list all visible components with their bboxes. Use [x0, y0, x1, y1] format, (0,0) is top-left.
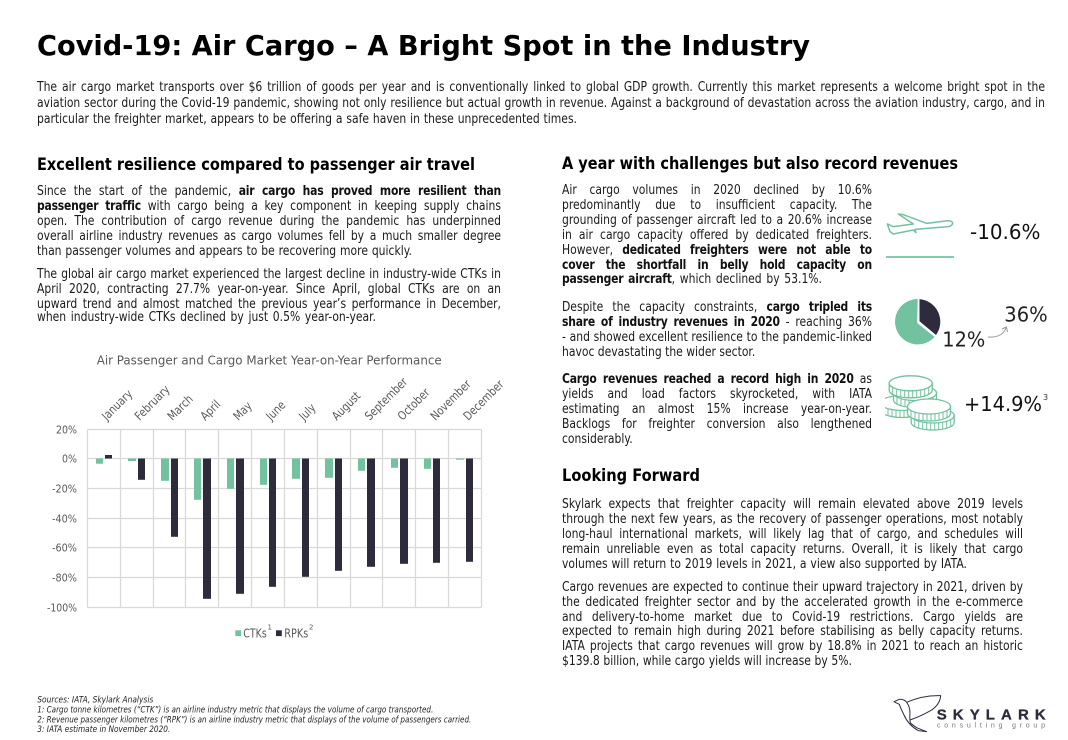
text block: resilience paragraph two: upward trend and almost matched the previous year’s performance in December,: [37, 297, 501, 312]
legend: CTKs: [243, 626, 267, 640]
text block: resilience paragraph one: than passenger volumes and appears to be recovering more quickly.: [37, 244, 412, 259]
text block: air cargo volumes: Air cargo volumes in 2020 declined by 10.6%: [562, 183, 872, 198]
text block: looking forward paragraph two: the dedicated freighter sector and by the accelerated growth in the e-commerce: [562, 595, 1023, 610]
text block: looking forward paragraph one: volumes will return to 2019 levels in 2021, a view also supported by IATA.: [562, 557, 967, 572]
text block: looking forward paragraph two: [562, 580, 1023, 669]
footnotes: Sources: IATA, Skylark Analysis: [37, 695, 154, 705]
stat: volume decline with plane icon: [886, 213, 1040, 258]
month labels: February: [132, 382, 173, 423]
tagline: consulting group: [937, 722, 1045, 730]
bar chart: air passenger and cargo performance: [47, 352, 507, 640]
chart title: Air Passenger and Cargo Market Year-on-Year Performance: [97, 352, 442, 368]
text block: looking forward paragraph one: remain unreliable even as total capacity returns. Overall, it is likely that cargo: [562, 542, 1023, 557]
y axis labels: -40%: [52, 512, 77, 526]
text block: cargo tripled share: share of industry revenues in 2020 - reaching 36%: [562, 315, 872, 330]
y axis labels: -20%: [52, 482, 77, 496]
text block: resilience paragraph two: April 2020, contracting 27.7% year-on-year. Since April, global CTKs are on an: [37, 282, 501, 297]
text block: air cargo volumes: [562, 183, 872, 287]
month labels: June: [263, 398, 289, 424]
y axis labels: 0%: [62, 452, 77, 466]
footnotes: [37, 695, 471, 735]
title: Covid-19: Air Cargo – A Bright Spot in the Industry: [37, 29, 810, 62]
legend: RPKs: [284, 626, 308, 640]
text block: resilience paragraph one: [37, 184, 501, 259]
text block: looking forward paragraph one: [562, 497, 1023, 572]
text block: looking forward paragraph two: $139.8 billion, while cargo yields will increase by 5%.: [562, 654, 852, 669]
intro text: The air cargo market transports over $6 trillion of goods per year and is conventionally linked to global GDP growth. Currently this market represents a welcome bright spot in the: [37, 80, 1045, 95]
legend: [235, 624, 313, 640]
text block: resilience paragraph two: when industry-wide CTKs declined by just 0.5% year-on-year.: [37, 310, 376, 325]
text block: air cargo volumes: in air cargo capacity offered by dedicated freighters.: [562, 228, 872, 243]
value: 12%: 12%: [942, 328, 985, 352]
stat: revenue growth with coins: [885, 375, 1048, 431]
y axis labels: [47, 424, 77, 614]
footnote marker: 3: [1043, 393, 1048, 402]
month labels: October: [395, 385, 433, 423]
intro text: aviation sector during the Covid-19 pandemic, showing not only resilience but actual growth in revenue. Against a background of devastation across the aviation industry, cargo, and in: [37, 96, 1045, 111]
text block: resilience paragraph one: passenger traffic with cargo being a key component in keeping supply chains: [37, 199, 501, 214]
text block: air cargo volumes: grounding of passenger aircraft led to a 20.6% increase: [562, 213, 872, 228]
month labels: July: [296, 400, 319, 424]
month labels: April: [198, 397, 224, 423]
value: +14.9%: [964, 392, 1042, 416]
text block: record revenues: estimating an almost 15% increase year-on-year.: [562, 402, 872, 417]
wordmark: SKYLARK: [937, 706, 1046, 723]
text block: air cargo volumes: passenger aircraft, which declined by 53.1%.: [562, 272, 822, 287]
logo: skylark consulting group: [894, 695, 1046, 732]
intro text: particular the freighter market, appears to be offering a safe haven in these unprecedented times.: [37, 112, 577, 127]
icon: pie chart: [895, 299, 940, 344]
icon: bird: [894, 696, 941, 732]
RPK bars: [105, 455, 473, 599]
text block: record revenues: Cargo revenues reached a record high in 2020 as: [562, 372, 872, 387]
month labels: August: [329, 388, 364, 423]
icon: coins: [880, 376, 954, 430]
text block: looking forward paragraph two: expected to remain high during 2021 before stabilising as belly capacity returns.: [562, 624, 1023, 639]
CTK bars: [96, 458, 464, 500]
y axis labels: -100%: [47, 602, 77, 614]
y axis labels: 20%: [56, 424, 77, 436]
text block: air cargo volumes: cover the shortfall in belly hold capacity on: [562, 258, 872, 273]
icon: plane taking off: [886, 214, 954, 257]
text block: cargo tripled share: [562, 300, 872, 360]
month labels: March: [165, 392, 196, 423]
text block: resilience paragraph one: open. The contribution of cargo revenue during the pandemic has underpinned: [37, 214, 501, 229]
legend: 1: [268, 624, 272, 632]
month labels: November: [428, 377, 474, 423]
y axis labels: -80%: [52, 572, 77, 584]
legend: 2: [309, 624, 313, 632]
intro text: [36, 80, 1045, 127]
text block: record revenues: [562, 372, 872, 447]
text block: looking forward paragraph two: IATA projects that cargo revenues will grow by 18.8% in 2021 to reach an historic: [562, 639, 1023, 654]
text block: cargo tripled share: Despite the capacity constraints, cargo tripled its: [562, 300, 872, 315]
text block: cargo tripled share: havoc devastating the wider sector.: [562, 345, 755, 360]
text block: resilience paragraph one: Since the start of the pandemic, air cargo has proved more resilient than: [37, 184, 501, 199]
month labels: December: [461, 377, 507, 423]
text block: resilience paragraph two: [36, 267, 501, 325]
text block: looking forward paragraph two: Cargo revenues are expected to continue their upward trajectory in 2021, driven by: [562, 580, 1023, 595]
month labels: [98, 375, 507, 424]
stat: share of revenue with pie: [895, 299, 1048, 352]
y axis labels: -60%: [52, 542, 77, 554]
text block: air cargo volumes: However, dedicated freighters were not able to: [562, 243, 872, 258]
text block: cargo tripled share: - and showed excellent resilience to the pandemic-linked: [562, 330, 872, 345]
text block: air cargo volumes: predominantly due to insufficient capacity. The: [562, 198, 872, 213]
footnotes: 3: IATA estimate in November 2020.: [37, 725, 170, 735]
text block: looking forward paragraph one: Skylark expects that freighter capacity will remain elevated above 2019 levels: [562, 497, 1023, 512]
text block: record revenues: considerably.: [562, 432, 633, 447]
arrow: [988, 327, 1008, 337]
text block: looking forward paragraph one: through the next few years, as the recovery of passenger operations, most notably: [562, 512, 1023, 527]
text block: resilience paragraph one: overall airline industry revenues as cargo volumes fell by a much smaller degree: [37, 229, 501, 244]
text block: looking forward paragraph two: and delivery-to-home market due to Covid-19 restrictions. Cargo yields are: [562, 610, 1023, 625]
text block: resilience paragraph two: The global air cargo market experienced the largest decline in industry-wide CTKs in: [37, 267, 501, 282]
text block: record revenues: Backlogs for freighter conversion also lengthened: [562, 417, 872, 432]
value: 36%: 36%: [1004, 303, 1048, 327]
month labels: May: [230, 399, 255, 423]
text block: record revenues: yields and load factors skyrocketed, with IATA: [562, 387, 872, 402]
month labels: January: [98, 387, 136, 424]
text block: looking forward paragraph one: long-haul international markets, will likely lag that of cargo, and schedules will: [562, 527, 1023, 542]
value: -10.6%: [970, 220, 1040, 244]
month labels: September: [362, 375, 411, 423]
